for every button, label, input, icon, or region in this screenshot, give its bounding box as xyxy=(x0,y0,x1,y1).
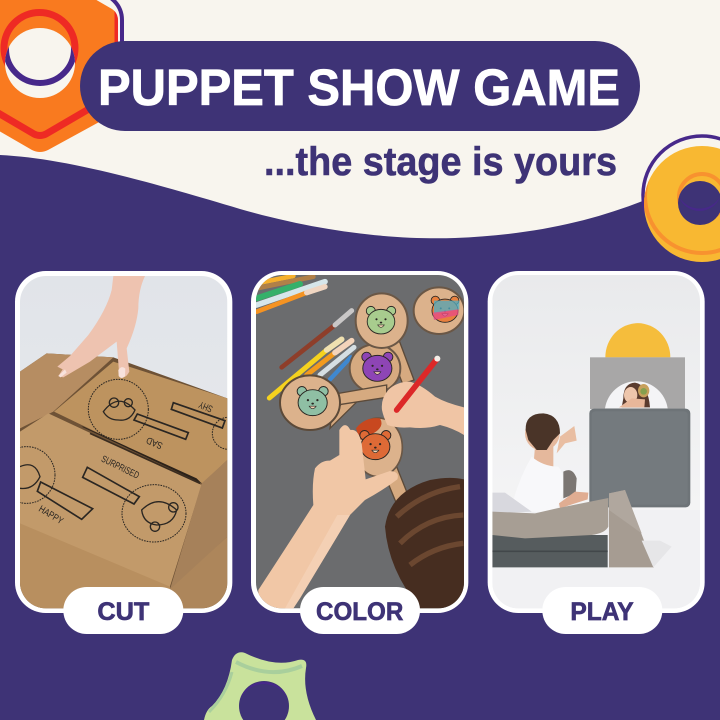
title banner xyxy=(80,41,640,131)
teddy xyxy=(563,470,577,498)
label pill: CUT: CUT xyxy=(97,598,150,626)
subtitle: ...the stage is yours xyxy=(264,140,617,184)
box labels: SHY xyxy=(197,398,215,414)
stage: dark block xyxy=(589,409,690,507)
markers xyxy=(257,276,354,398)
red marker xyxy=(397,359,437,410)
photo: hand opening cardboard box xyxy=(20,276,228,608)
box labels: SURPRISED xyxy=(99,454,141,482)
label pill: COLOR: COLOR xyxy=(316,598,403,626)
boy xyxy=(557,426,577,453)
photo: child colouring bear puppets xyxy=(256,275,464,608)
label pill: PLAY xyxy=(542,587,662,634)
title: PUPPET SHOW GAME xyxy=(98,59,620,116)
hair xyxy=(385,478,464,608)
puppet templates xyxy=(20,378,227,542)
purple wave background xyxy=(0,155,720,720)
stage: sun xyxy=(605,323,670,357)
box labels: HAPPY xyxy=(36,504,65,527)
label pill: PLAY: PLAY xyxy=(570,598,634,626)
stage: arch window xyxy=(605,381,668,408)
left hand and arm xyxy=(258,425,398,608)
right hand xyxy=(382,382,464,435)
panel: play xyxy=(488,271,705,634)
box labels: SAD xyxy=(145,434,165,451)
decorative yellow donut xyxy=(643,136,720,262)
box labels xyxy=(36,398,215,527)
decorative orange hexagon xyxy=(0,0,122,152)
panel: cut xyxy=(15,271,232,634)
panel: color xyxy=(251,271,468,634)
decorative green shape xyxy=(204,652,316,720)
stage: upper block xyxy=(590,357,685,409)
sofa xyxy=(492,493,532,513)
label pill: COLOR xyxy=(300,587,420,634)
photo: children playing puppet show xyxy=(492,275,700,608)
label pill: CUT xyxy=(63,587,183,634)
hand xyxy=(57,276,145,377)
puppet discs xyxy=(390,341,415,382)
